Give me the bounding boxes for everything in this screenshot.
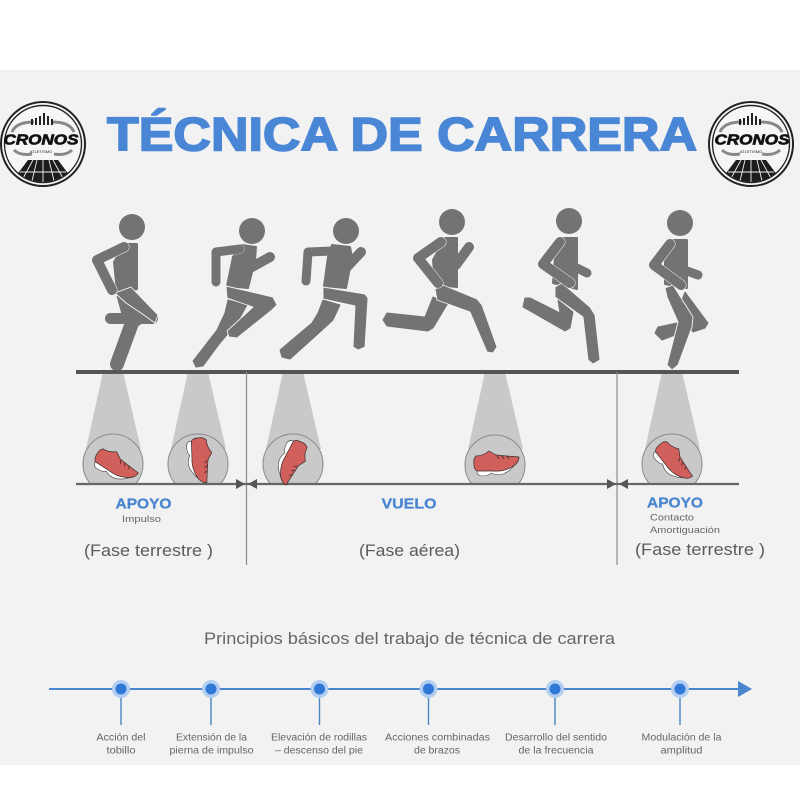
phase axis with arrows bbox=[76, 479, 739, 489]
caption: tobillo: Acción del bbox=[96, 732, 146, 744]
phase divider lines bbox=[246, 372, 617, 565]
runner 4 bbox=[383, 209, 497, 353]
caption: amplitud: amplitud bbox=[660, 746, 702, 756]
subtitle: Principios básicos del trabajo de técnica de carrera bbox=[204, 630, 616, 648]
label: apoyo contacto: APOYO bbox=[647, 494, 703, 512]
label: apoyo contacto: Contacto bbox=[650, 512, 694, 524]
logo: right: ATLETISMO bbox=[740, 149, 762, 154]
label: apoyo contacto: (Fase terrestre ) bbox=[635, 541, 765, 559]
runner 1 bbox=[97, 214, 158, 364]
caption: rodillas: – descenso del pie bbox=[275, 746, 363, 756]
logo: right: CRONOS bbox=[714, 132, 790, 148]
shoe: despegue bbox=[269, 436, 313, 488]
logo: left: ATLETISMO bbox=[30, 149, 52, 154]
label: apoyo impulso: Impulso bbox=[122, 514, 161, 525]
label: apoyo impulso: APOYO bbox=[116, 496, 172, 512]
label: apoyo contacto: Amortiguación bbox=[650, 525, 720, 536]
runner 5 bbox=[523, 208, 600, 364]
runner 2 bbox=[193, 218, 277, 367]
label: vuelo bbox=[359, 496, 460, 560]
caption: brazos: Acciones combinadas bbox=[385, 732, 490, 744]
title: TÉCNICA DE CARRERA bbox=[107, 108, 697, 160]
caption: pierna bbox=[170, 732, 254, 756]
logo: left: CRONOS bbox=[4, 132, 78, 148]
caption: pierna: Extensión de la bbox=[176, 732, 247, 744]
caption: rodillas bbox=[271, 732, 367, 756]
caption: amplitud bbox=[642, 732, 722, 756]
caption: rodillas: Elevación de rodillas bbox=[271, 732, 367, 744]
shoe: contacto bbox=[650, 437, 697, 488]
footprint cones and foot circles bbox=[82, 374, 702, 483]
caption: brazos bbox=[385, 732, 490, 756]
caption: brazos: de brazos bbox=[414, 746, 460, 756]
logo: left bbox=[1, 102, 85, 186]
shoe: impulso 2 bbox=[186, 437, 213, 483]
ground line bbox=[76, 370, 739, 374]
label: apoyo contacto bbox=[635, 494, 765, 559]
timeline bbox=[49, 680, 752, 725]
shoe: vuelo bbox=[474, 451, 519, 476]
caption: frecuencia: de la frecuencia bbox=[518, 746, 594, 756]
runner 3 bbox=[280, 218, 368, 359]
caption: frecuencia bbox=[505, 732, 607, 756]
logo: right bbox=[709, 102, 793, 186]
caption: tobillo: tobillo bbox=[106, 746, 136, 756]
caption: tobillo bbox=[96, 732, 146, 756]
caption: pierna: pierna de impulso bbox=[170, 746, 254, 756]
label: vuelo: (Fase aérea) bbox=[359, 542, 460, 560]
runner 6 bbox=[654, 210, 708, 370]
label: vuelo: VUELO bbox=[382, 496, 437, 512]
label: apoyo impulso bbox=[84, 496, 213, 560]
caption: amplitud: Modulación de la bbox=[642, 732, 722, 744]
label: apoyo impulso: (Fase terrestre ) bbox=[84, 542, 213, 560]
caption: frecuencia: Desarrollo del sentido bbox=[505, 732, 607, 744]
shoe: impulso 1 bbox=[90, 443, 142, 489]
